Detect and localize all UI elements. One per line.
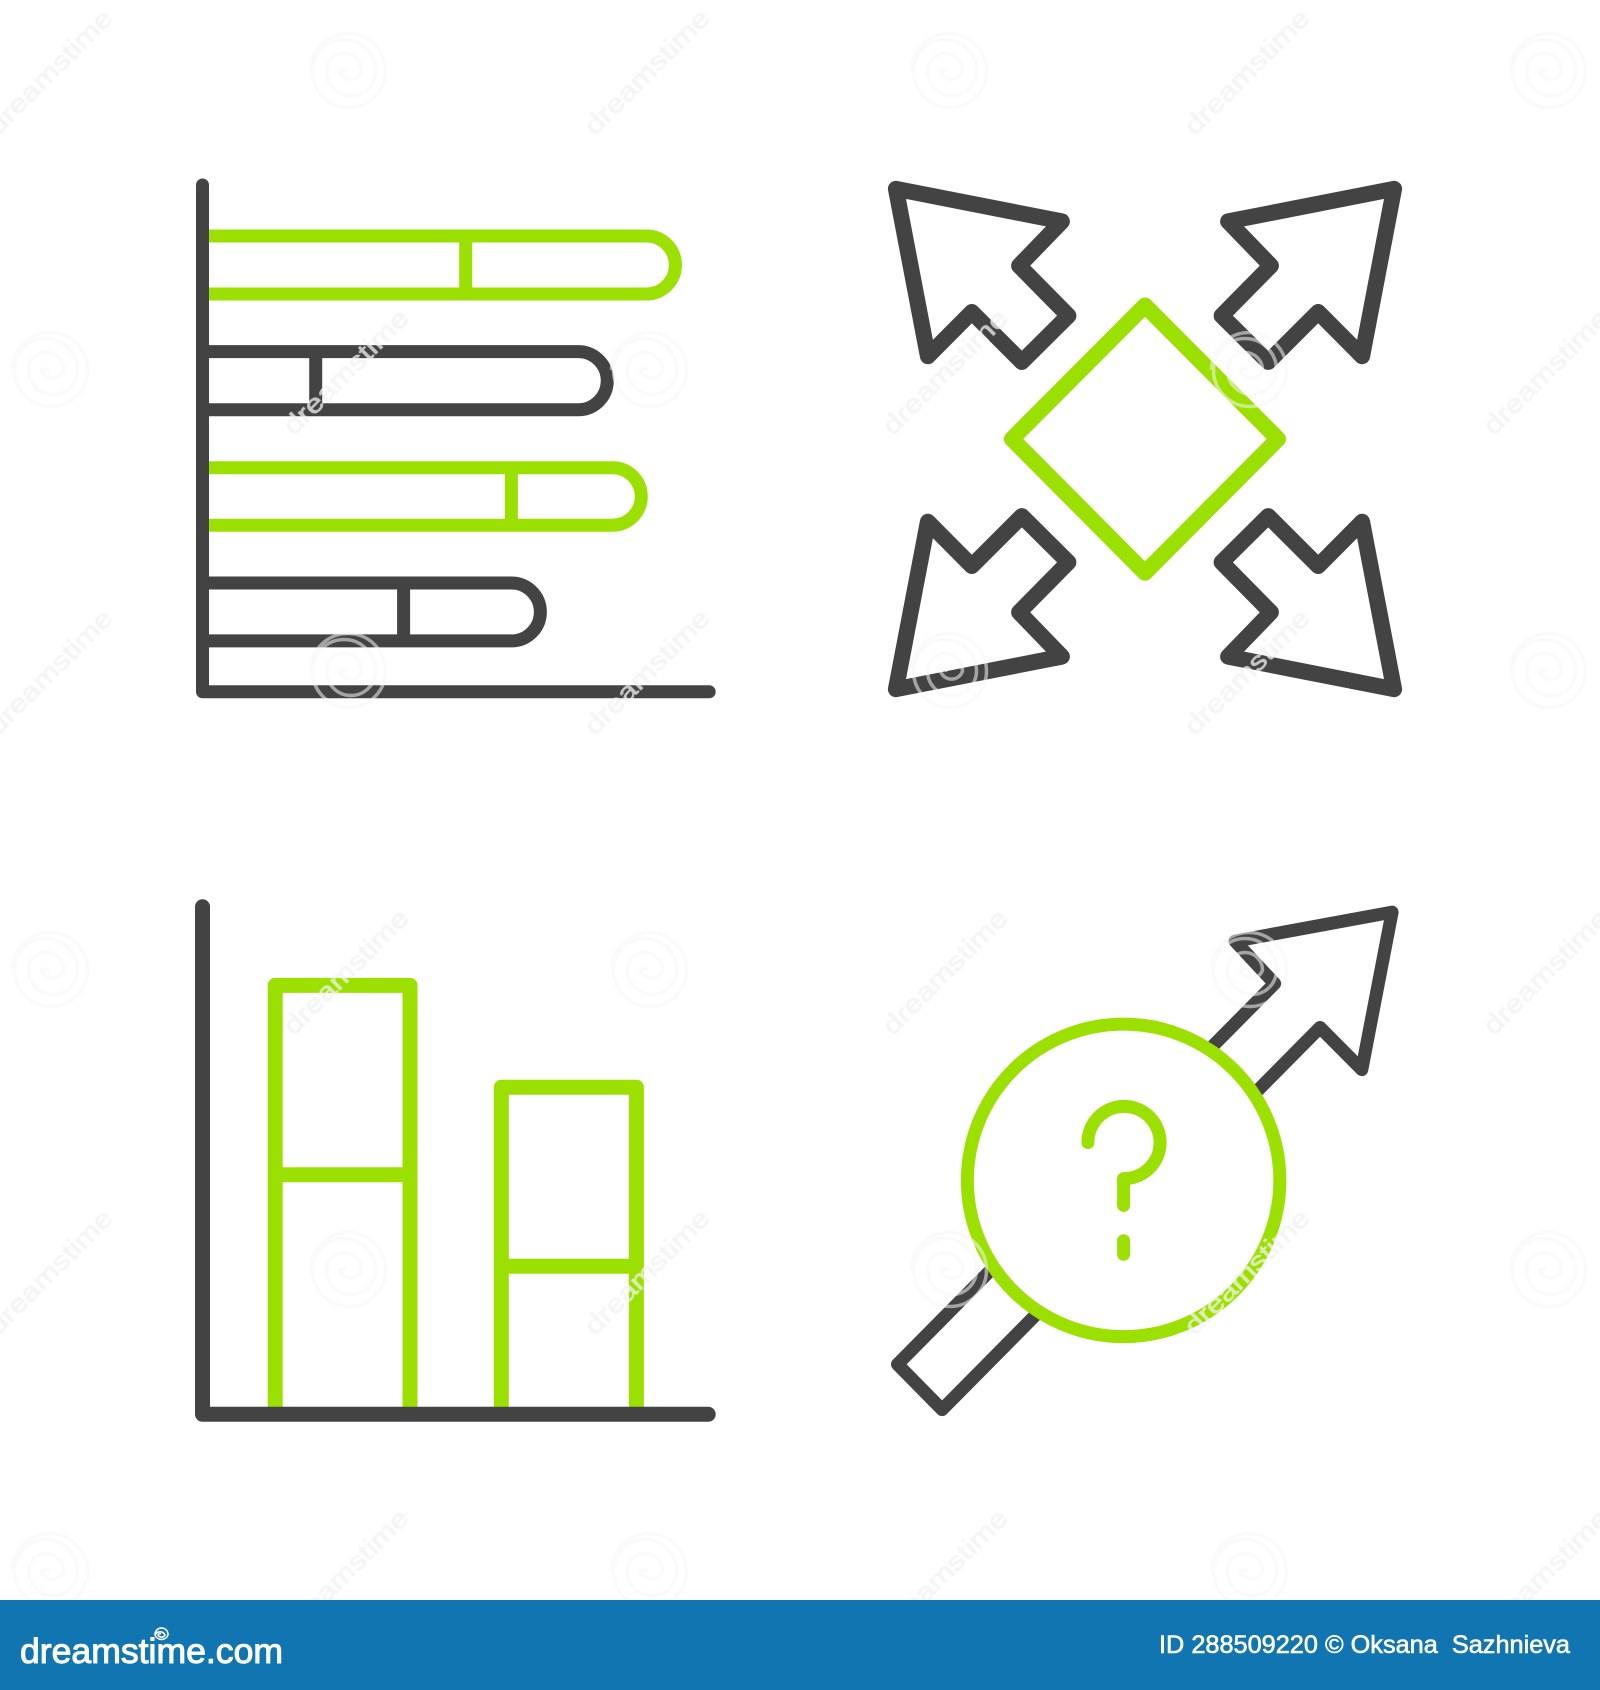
watermark pattern: dreamstime bbox=[876, 303, 1014, 441]
bar 2 dark bbox=[205, 352, 607, 410]
chart axes bbox=[202, 185, 709, 692]
watermark pattern: dreamstime bbox=[1477, 903, 1600, 1041]
watermark pattern: dreamstime bbox=[277, 903, 415, 1041]
watermark pattern: dreamstime bbox=[1477, 1503, 1600, 1641]
bar 1 green bbox=[205, 236, 675, 294]
watermark pattern: dreamstime bbox=[578, 1203, 716, 1341]
question mark bbox=[1088, 1106, 1160, 1254]
circle bbox=[967, 1024, 1280, 1337]
watermark pattern: dreamstime bbox=[876, 903, 1014, 1041]
column 2 bbox=[501, 1087, 636, 1414]
watermark pattern: dreamstime bbox=[277, 1503, 415, 1641]
arrow bottom right bbox=[1222, 516, 1394, 689]
watermark pattern: dreamstime bbox=[1178, 1203, 1316, 1341]
arrow top right bbox=[1222, 189, 1394, 362]
panel: four arrows around diamond icon bbox=[896, 189, 1394, 689]
panel: stacked column chart icon bbox=[202, 907, 708, 1414]
panel: arrow with question mark icon bbox=[898, 912, 1392, 1410]
watermark pattern: dreamstime bbox=[578, 3, 716, 141]
chart axes bbox=[202, 907, 708, 1414]
watermark pattern: dreamstime bbox=[578, 603, 716, 741]
bar 4 dark bbox=[205, 583, 540, 641]
column 1 bbox=[275, 985, 410, 1414]
panel: horizontal bar chart icon bbox=[202, 185, 709, 692]
watermark pattern: dreamstime bbox=[876, 1503, 1014, 1641]
watermark pattern: dreamstime bbox=[1178, 3, 1316, 141]
logo wordmark: dreamstime.com bbox=[20, 1632, 283, 1671]
centre diamond bbox=[1012, 306, 1278, 573]
watermark pattern: dreamstime bbox=[1178, 603, 1316, 741]
footer banner bbox=[0, 1600, 1600, 1690]
watermark pattern: dreamstime bbox=[277, 303, 415, 441]
bar 3 green bbox=[205, 468, 641, 525]
arrow top left bbox=[896, 189, 1068, 362]
arrow bottom left bbox=[896, 516, 1068, 689]
diagonal arrow bbox=[898, 912, 1392, 1410]
image credit: ID 288509220 © Oksana Sazhnieva bbox=[1159, 1631, 1570, 1659]
watermark pattern: dreamstime bbox=[1477, 303, 1600, 441]
logo spiral bbox=[155, 1628, 168, 1639]
